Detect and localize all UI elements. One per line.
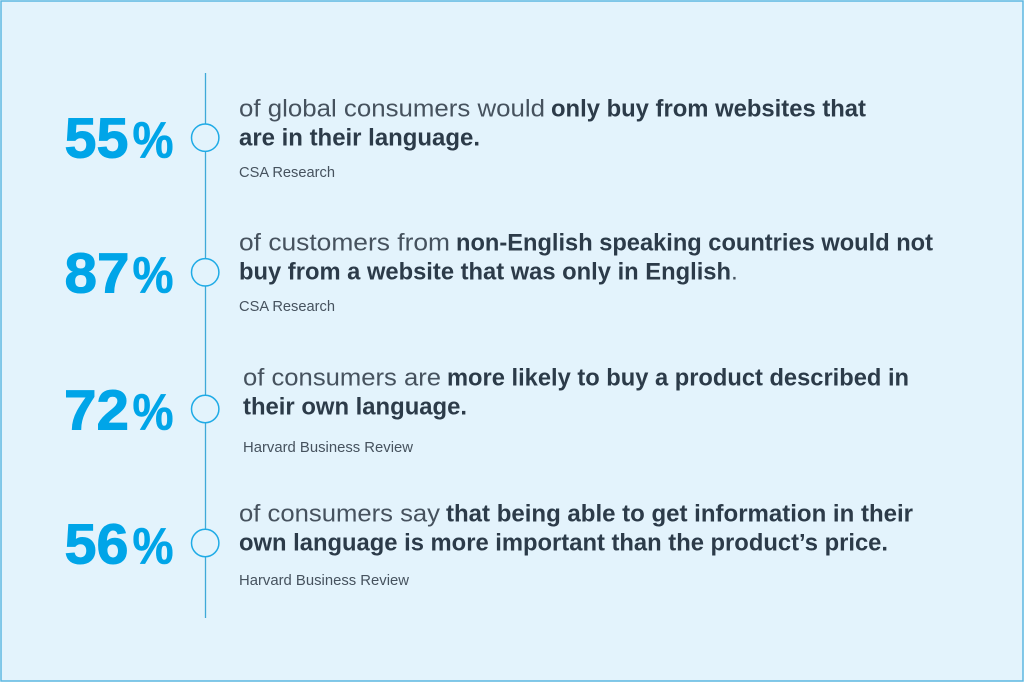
source: CSA Research: CSA Research <box>239 165 335 181</box>
stat row: 72% <box>64 364 909 456</box>
number: 56% <box>64 512 174 576</box>
source: Harvard Business Review: Harvard Business Review <box>243 440 414 456</box>
number: 87%: % <box>132 246 174 304</box>
number: 87%: 87 <box>64 242 130 306</box>
number: 72% <box>64 378 174 442</box>
number: 72%: 72 <box>64 378 129 442</box>
text block: statement 2: buy from a website that was only in English <box>239 258 731 286</box>
text block: statement 4: of consumers say <box>239 500 441 528</box>
number: 55% <box>64 106 174 170</box>
source: Harvard Business Review: Harvard Business Review <box>239 573 410 589</box>
text block: statement 3: of consumers are <box>243 364 441 392</box>
icon: timeline marker 4 <box>192 529 219 557</box>
text block: statement 2 <box>239 230 933 286</box>
text block: statement 4: own language is more important than the product’s price. <box>239 530 888 556</box>
text block: statement 2: of customers from <box>239 230 450 256</box>
text block: statement 4: that being able to get information in their <box>446 500 913 528</box>
text block: statement 1 <box>239 96 866 152</box>
stat row: 56% <box>64 500 913 589</box>
number: 56%: % <box>132 518 174 574</box>
text block: statement 3: more likely to buy a product described in <box>447 364 909 392</box>
stat row: 87% <box>64 230 933 315</box>
text block: statement 3: their own language. <box>243 394 467 420</box>
number: 87% <box>64 242 174 306</box>
timeline: vertical line <box>204 73 206 618</box>
number: 56%: 56 <box>64 512 128 576</box>
source: CSA Research: CSA Research <box>239 299 335 315</box>
text block: statement 3 <box>243 364 909 420</box>
number: 55%: % <box>132 112 174 168</box>
icon: timeline marker 3 <box>192 395 219 423</box>
stat row: 55% <box>64 96 866 181</box>
number: 72%: % <box>132 384 174 440</box>
text block: statement 1: of global consumers would <box>239 96 545 122</box>
text block: statement 2: non-English speaking countries would not <box>456 230 933 256</box>
text block: statement 4 <box>239 500 913 556</box>
icon: timeline marker 1 <box>192 124 219 151</box>
number: 55%: 55 <box>64 106 128 170</box>
text block: statement 1: only buy from websites that <box>551 96 866 122</box>
text block: statement 1: are in their language. <box>239 124 480 152</box>
text block: statement 2: . <box>731 258 738 286</box>
icon: timeline marker 2 <box>192 259 219 286</box>
